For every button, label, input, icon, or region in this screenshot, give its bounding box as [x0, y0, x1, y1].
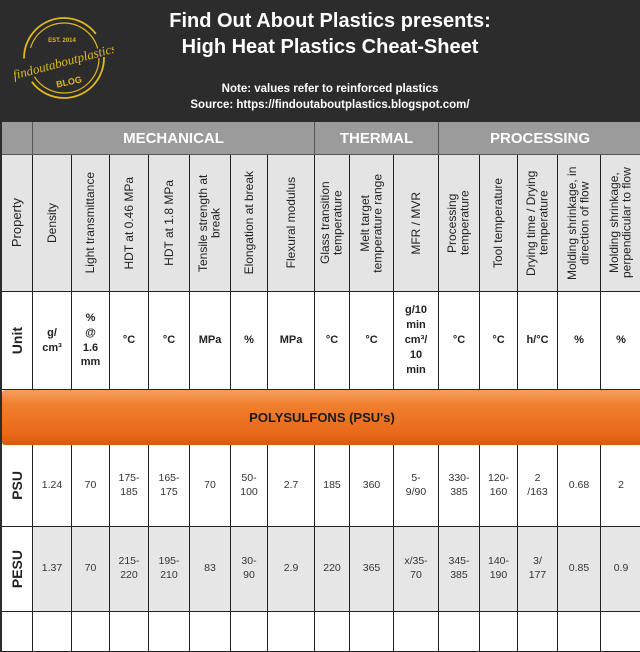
unit row: h/°C	[526, 334, 549, 346]
row: PESU: 1.37	[42, 562, 62, 574]
row: PSU: 165-	[158, 472, 180, 484]
row: PSU: 175	[160, 486, 178, 498]
row: PESU: 220	[120, 569, 138, 581]
row: PSU: 385	[450, 486, 468, 498]
header: thermal: THERMAL	[340, 130, 413, 146]
property row: Tool temperature	[491, 178, 505, 268]
row: PESU: 365	[363, 562, 380, 574]
row: PESU: 210	[160, 569, 178, 581]
title	[169, 10, 491, 58]
unit row: 1.6	[83, 342, 98, 354]
row: PSU: 175-	[118, 472, 140, 484]
row: PSU: 185	[120, 486, 138, 498]
property row: Property	[9, 198, 24, 248]
row: PESU: 30-	[241, 555, 257, 567]
unit row: %	[616, 334, 626, 346]
row: PSU: 9/90	[406, 486, 426, 498]
header: mechanical: MECHANICAL	[123, 130, 224, 146]
row: PSU: 100	[240, 486, 258, 498]
unit row: %	[86, 312, 95, 324]
row: PESU: 385	[450, 569, 468, 581]
row: PESU: 215-	[118, 555, 140, 567]
property row: Drying time / Drying temperature	[524, 170, 550, 276]
row: PESU: 83	[204, 562, 216, 574]
unit row	[2, 292, 640, 390]
row: PESU: 190	[490, 569, 507, 581]
unit row: °C	[365, 334, 378, 346]
property row: Tensile strength at break	[196, 174, 223, 272]
row: PESU: PESU	[9, 550, 25, 588]
row: PESU: 0.85	[569, 562, 589, 574]
property row: Processing temperature	[445, 191, 472, 255]
property row: Glass transition temperature	[318, 182, 345, 264]
row: PESU: 220	[323, 562, 341, 574]
row: PESU: x/35-	[404, 555, 428, 567]
row: PESU: 90	[243, 569, 255, 581]
row: PSU: 50-	[241, 472, 257, 484]
property row: Melt target	[358, 195, 372, 251]
row: PSU: 70	[85, 479, 96, 491]
property row: Flexural modulus	[284, 177, 298, 269]
unit row: @	[85, 327, 96, 339]
row: PSU: 360	[363, 479, 380, 491]
row: PSU: 185	[323, 479, 341, 491]
logo: BLOG	[55, 74, 83, 90]
unit row: g/10	[405, 304, 427, 316]
property row: Molding shrinkage, in direction of flow	[565, 166, 592, 280]
table	[2, 122, 640, 640]
row: PESU: 345-	[448, 555, 470, 567]
unit row: Unit	[9, 327, 25, 354]
header: mechanical	[33, 122, 315, 155]
row: PESU: 195-	[158, 555, 180, 567]
note	[190, 83, 470, 111]
property row: Light transmittance	[83, 172, 97, 274]
row: PSU: 70	[204, 479, 216, 491]
row: PESU: 0.9	[614, 562, 628, 574]
unit row: °C	[326, 334, 338, 346]
next row (partial)	[2, 612, 640, 652]
unit row: °C	[492, 334, 505, 346]
row: PESU: 70	[85, 562, 96, 574]
property row	[2, 155, 640, 292]
row: PSU: 160	[490, 486, 507, 498]
unit row: MPa	[199, 334, 221, 346]
row: PESU: 3/	[533, 555, 542, 567]
row: PSU: 1.24	[42, 479, 62, 491]
unit row: °C	[163, 334, 175, 346]
row: PSU: PSU	[9, 471, 25, 500]
row: PSU: /163	[527, 486, 548, 498]
property row: MFR / MVR	[409, 192, 423, 254]
row: PSU	[2, 445, 640, 527]
logo	[14, 17, 114, 99]
unit row: °C	[123, 334, 135, 346]
note: Note: values refer to reinforced plastics	[222, 83, 438, 95]
unit row: cm³	[42, 342, 62, 354]
unit row: MPa	[280, 334, 302, 346]
row: PSU: 2	[535, 472, 540, 484]
unit row: °C	[453, 334, 465, 346]
row: PSU: 0.68	[569, 479, 589, 491]
row: PSU: 2.7	[284, 479, 298, 491]
row: PESU: 70	[410, 569, 422, 581]
logo: EST. 2014	[48, 38, 77, 44]
property row: HDT at 1.8 MPa	[162, 180, 176, 266]
property row: HDT at 0.46 MPa	[122, 177, 136, 269]
section band: polysulfons	[2, 390, 640, 445]
header: processing	[439, 122, 640, 155]
unit row: %	[244, 334, 254, 346]
section band: polysulfons: POLYSULFONS (PSU's)	[249, 410, 395, 425]
property row: Molding shrinkage, perpendicular to flow	[607, 168, 634, 278]
unit row: min	[406, 364, 426, 376]
header: thermal	[315, 122, 439, 155]
unit row: g/	[47, 327, 57, 339]
property row: Density	[45, 203, 59, 243]
title: High Heat Plastics Cheat-Sheet	[182, 36, 478, 58]
row: PESU: 140-	[488, 555, 509, 567]
header: processing: PROCESSING	[490, 130, 590, 146]
unit row: mm	[81, 356, 100, 368]
note: Source: https://findoutaboutplastics.blogspot.com/	[190, 99, 470, 111]
unit row: %	[574, 334, 584, 346]
row: PESU: 177	[529, 569, 546, 581]
unit row: min	[406, 319, 426, 331]
group headers	[2, 122, 640, 155]
row: PESU	[2, 527, 640, 612]
title: Find Out About Plastics presents:	[169, 10, 491, 32]
property row: Elongation at break	[242, 171, 256, 275]
row: PESU: 2.9	[284, 562, 298, 574]
row: PSU: 2	[618, 479, 624, 491]
unit row: cm³/	[405, 334, 427, 346]
row: PSU: 330-	[448, 472, 470, 484]
row: PSU: 120-	[488, 472, 509, 484]
unit row: 10	[410, 349, 422, 361]
row: PSU: 5-	[411, 472, 421, 484]
property row: temperature range	[370, 174, 384, 272]
